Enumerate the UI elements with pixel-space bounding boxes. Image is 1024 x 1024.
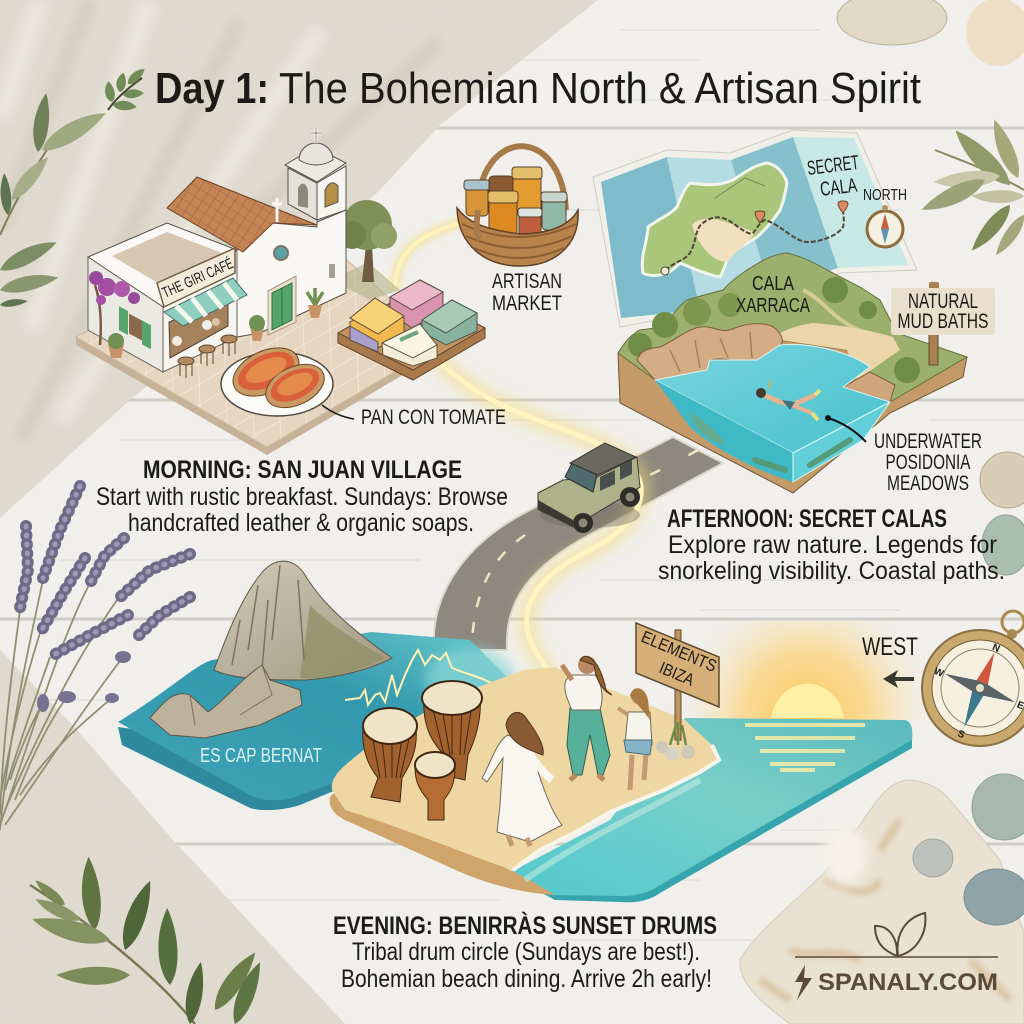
es cap bernat label: ES CAP BERNAT	[200, 745, 322, 767]
jeep	[538, 443, 640, 533]
mountain	[214, 561, 392, 680]
pan con tomate label: PAN CON TOMATE	[361, 406, 506, 429]
soap tray	[338, 280, 485, 380]
stones and rock: bottom right	[740, 774, 1024, 1024]
cliffs	[637, 324, 782, 380]
logo: spanaly.com: SPANALY.COM	[818, 969, 998, 996]
title: The Bohemian North & Artisan Spirit	[279, 64, 921, 113]
icon: brass compass: W	[932, 666, 946, 680]
planters	[108, 344, 124, 358]
cala xarraca label	[736, 273, 810, 317]
artisan basket	[457, 146, 578, 266]
lavender bunch	[0, 486, 190, 830]
hill	[618, 253, 967, 402]
panel: morning village	[76, 128, 485, 455]
linen cloth: bottom left	[0, 650, 345, 1024]
road	[434, 437, 723, 650]
pan con tomate label	[322, 405, 506, 429]
plaza	[76, 260, 440, 455]
dancer in white dress	[482, 712, 562, 846]
stones: right edge	[980, 452, 1024, 575]
icon: olive sprig	[103, 66, 147, 111]
natural mud baths sign: MUD BATHS	[898, 310, 988, 333]
church	[167, 128, 346, 337]
panel: evening sea	[505, 718, 912, 902]
golden path: market to beach	[440, 362, 641, 672]
window and bougainvillea	[89, 271, 151, 349]
north label: NORTH	[863, 187, 907, 204]
linen cloth: top left	[0, 0, 598, 518]
evening text block: Bohemian beach dining. Arrive 2h early!	[341, 965, 712, 993]
small rocks	[150, 665, 302, 738]
cala xarraca label: CALA	[752, 273, 795, 295]
olive branch: top left	[0, 92, 110, 308]
morning text block: MORNING: SAN JUAN VILLAGE	[143, 456, 462, 484]
underwater posidonia label: POSIDONIA	[886, 451, 970, 474]
tree	[332, 200, 400, 300]
stools	[178, 335, 237, 378]
olive branch: bottom left	[29, 856, 267, 1024]
stones: top right	[837, 0, 1024, 66]
soaps	[390, 280, 443, 328]
icon: small compass	[867, 205, 903, 247]
logo: spanaly.com	[795, 913, 998, 1000]
cafe interior	[169, 298, 228, 358]
island	[642, 163, 787, 277]
secret cala label: CALA	[819, 175, 859, 201]
sun reflection	[745, 725, 865, 770]
drums	[363, 681, 482, 820]
beach	[780, 323, 900, 380]
tower	[285, 128, 346, 220]
roof	[167, 177, 317, 252]
natural mud baths sign: NATURAL	[908, 290, 978, 313]
woman in shorts	[618, 688, 652, 790]
olive branch: top right	[918, 117, 1024, 259]
man with long hair	[562, 656, 612, 780]
afternoon text block	[658, 505, 1005, 585]
evening text block	[333, 911, 717, 993]
underwater posidonia label: MEADOWS	[887, 472, 969, 495]
afternoon text block: Explore raw nature. Legends for	[668, 531, 997, 559]
snorkeler	[756, 380, 820, 420]
plate: pan con tomate	[221, 338, 333, 416]
title: Day 1:	[155, 64, 269, 113]
underwater posidonia label: UNDERWATER	[874, 430, 982, 453]
sound wave	[345, 650, 499, 710]
icon: brass compass: N	[991, 642, 1001, 655]
sign: elements ibiza: IBIZA	[656, 658, 698, 690]
secret cala label	[806, 152, 860, 201]
route	[665, 207, 844, 270]
morning text block: handcrafted leather & organic soaps.	[128, 509, 474, 537]
cafe	[88, 223, 323, 378]
panel: afternoon diorama	[618, 253, 995, 493]
cafe sign: THE GIRI CAFÉ	[160, 255, 236, 302]
morning text block	[96, 456, 508, 537]
artisan market label	[492, 270, 562, 315]
evening text block: Tribal drum circle (Sundays are best!).	[352, 938, 700, 966]
icon: brass compass: S	[956, 728, 967, 741]
cala xarraca label: XARRACA	[736, 295, 810, 317]
sign: elements ibiza	[636, 623, 720, 761]
icon: brass compass	[914, 611, 1024, 758]
natural mud baths sign	[891, 282, 995, 365]
cafe sign	[157, 248, 236, 307]
golden path: village to market	[395, 222, 462, 290]
awning	[164, 278, 247, 326]
west label and arrow: WEST	[862, 633, 918, 661]
water	[655, 344, 890, 453]
panel: evening beach	[330, 623, 865, 895]
artisan market label: MARKET	[492, 292, 562, 315]
west label and arrow	[862, 633, 918, 688]
sign: elements ibiza: ELEMENTS	[638, 627, 720, 676]
panel: es cap bernat	[118, 561, 520, 810]
sun glow and sun	[680, 621, 934, 720]
evening text block: EVENING: BENIRRÀS SUNSET DRUMS	[333, 911, 717, 940]
morning text block: Start with rustic breakfast. Sundays: Browse	[96, 483, 508, 511]
artisan market label: ARTISAN	[492, 270, 562, 293]
underwater posidonia label	[874, 430, 982, 495]
folded map	[593, 130, 917, 327]
callout line	[828, 418, 866, 442]
earth block	[618, 300, 967, 493]
secret cala label: SECRET	[806, 152, 860, 180]
